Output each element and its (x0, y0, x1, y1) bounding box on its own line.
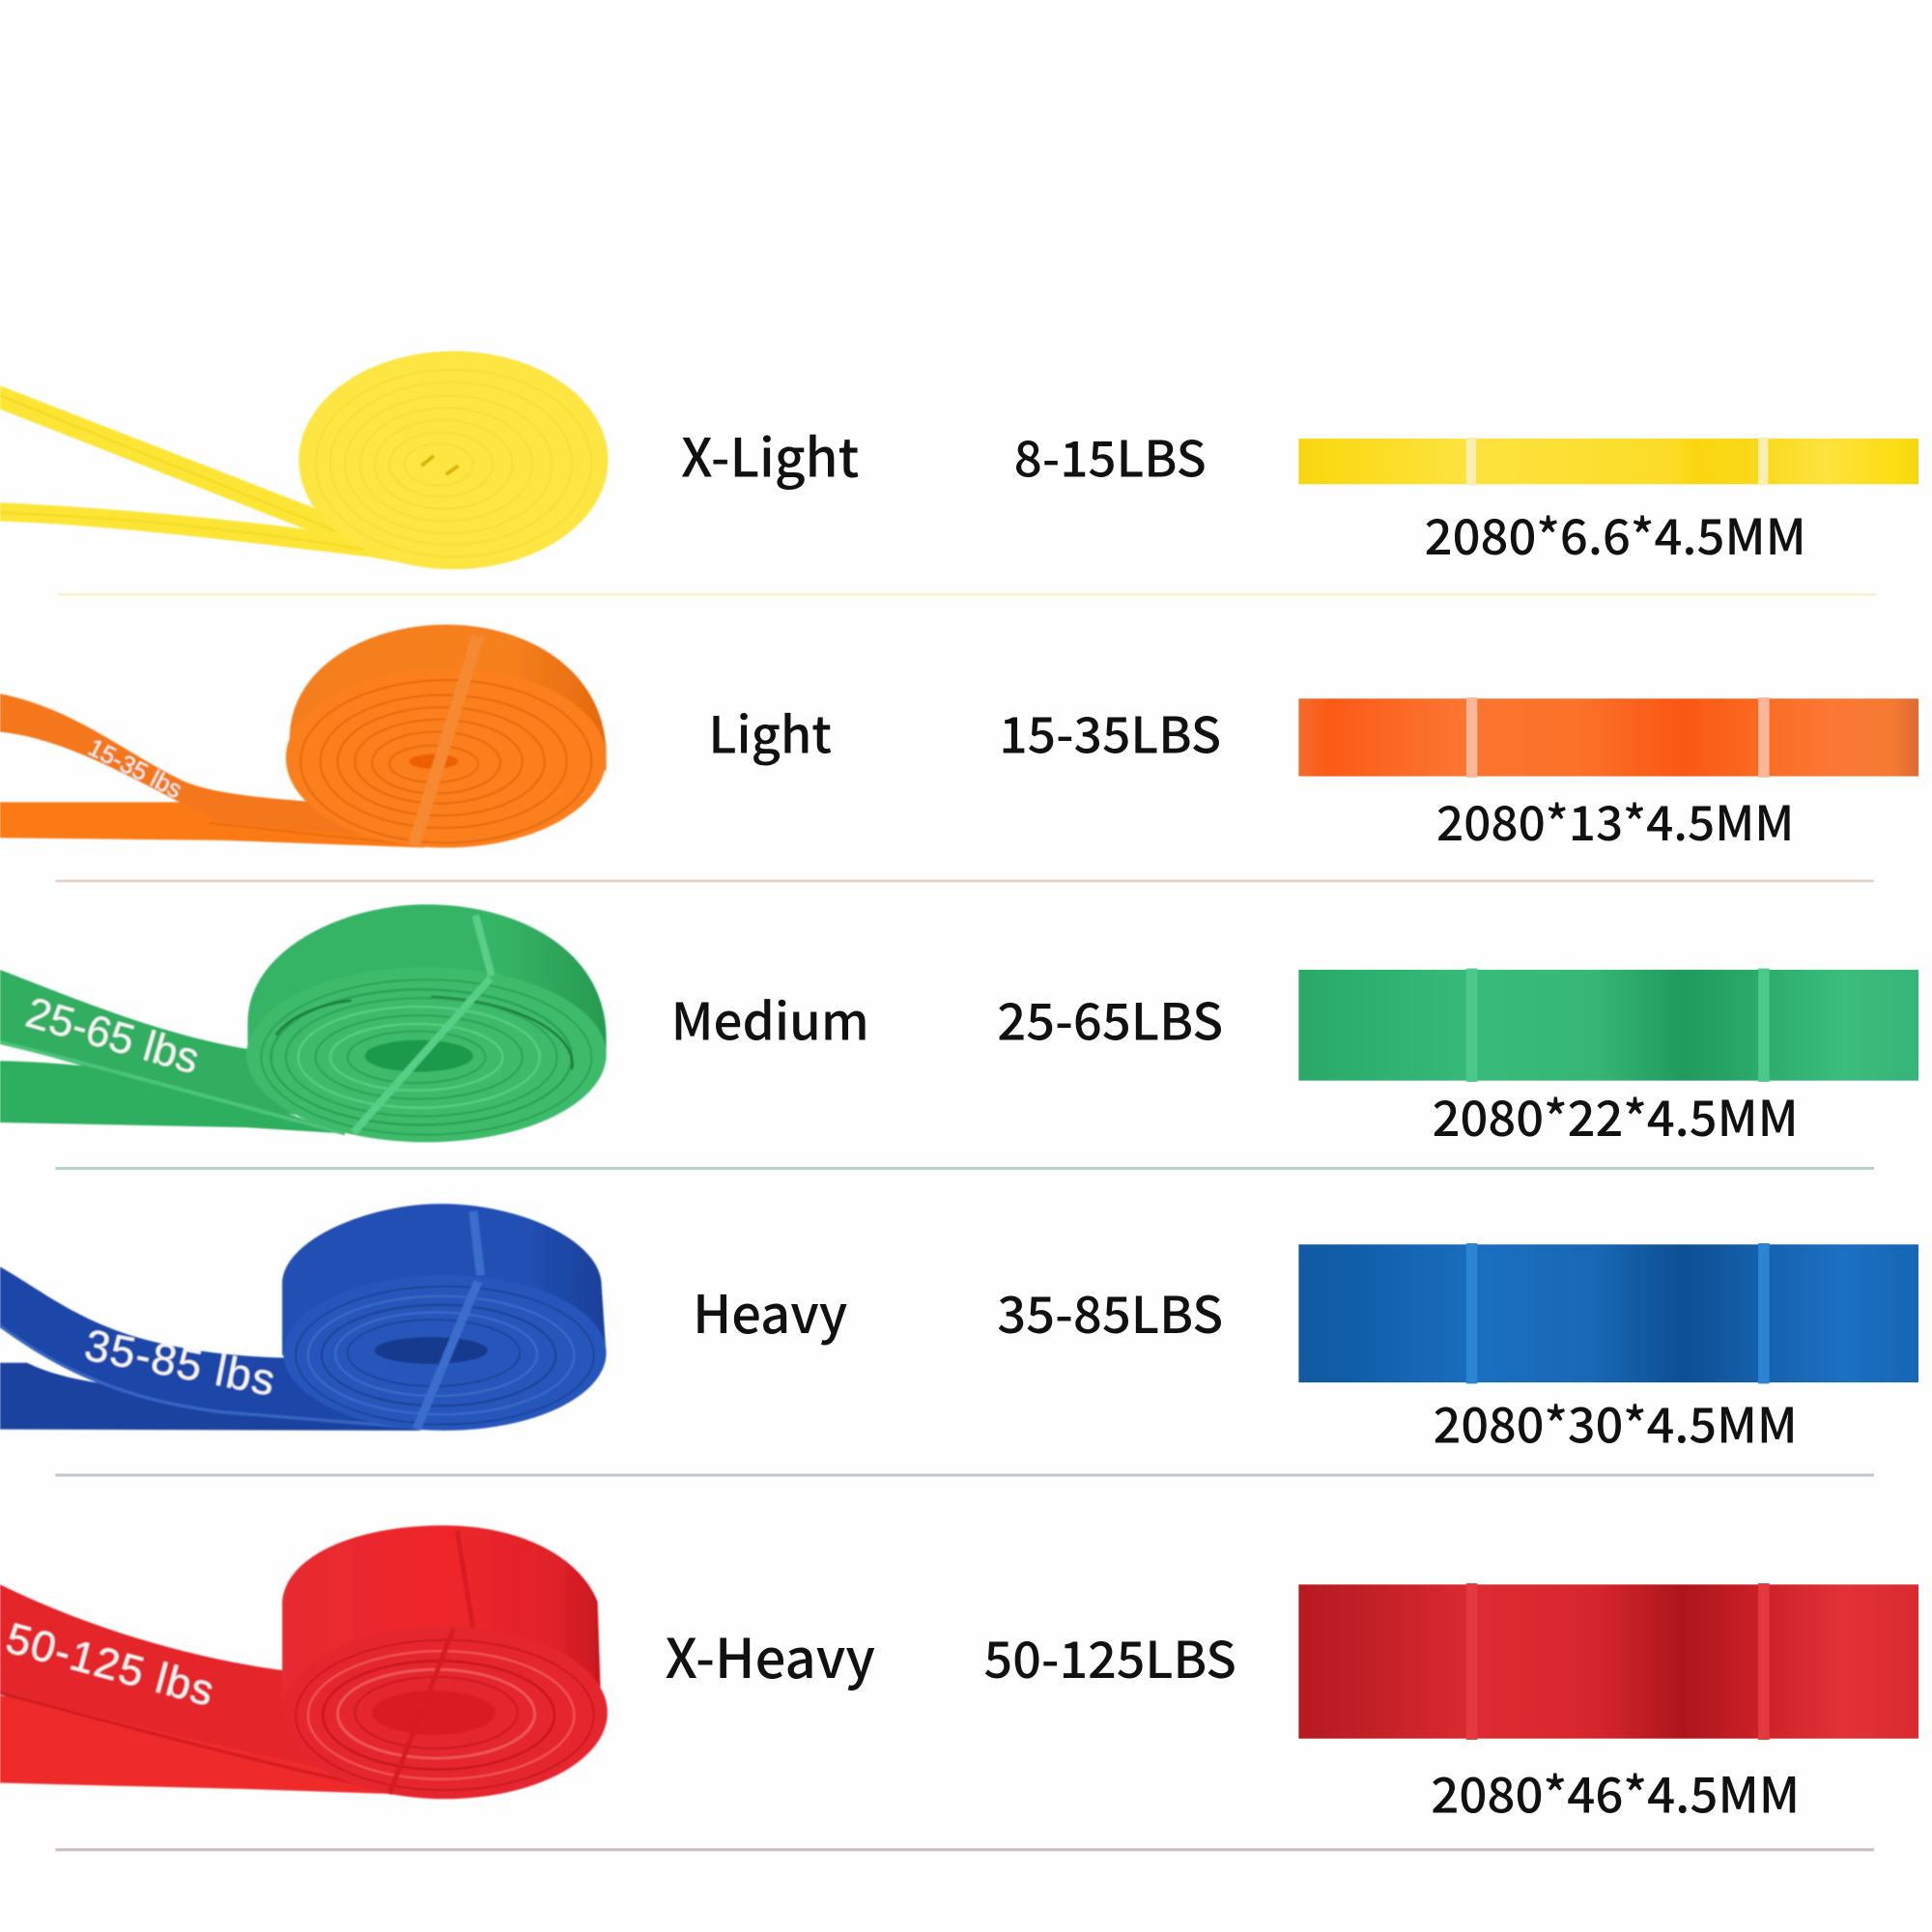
label: light name: Light (708, 695, 832, 768)
red rolled band photo (0, 1525, 608, 1799)
label: yellow dimensions: 2080*6.6*4.5MM (1425, 497, 1806, 569)
blue rolled band photo: 35-85 lbs (81, 1320, 280, 1406)
blue rolled band photo (0, 1204, 607, 1431)
band swatch: blue (1298, 1243, 1918, 1383)
label: x-heavy resistance: 50-125LBS (984, 1620, 1236, 1692)
row divider: heavy (55, 1474, 1874, 1477)
label: light resistance: 15-35LBS (999, 695, 1221, 767)
row divider: x-light (58, 593, 1877, 596)
label: heavy name: Heavy (693, 1272, 847, 1349)
label: medium resistance: 25-65LBS (997, 982, 1223, 1056)
red rolled band photo: 50-125 lbs (1, 1615, 220, 1716)
band swatch: orange (1298, 697, 1918, 778)
band swatch: red (1298, 1583, 1918, 1740)
label: green dimensions: 2080*22*4.5MM (1433, 1079, 1799, 1151)
row divider: x-heavy (55, 1848, 1874, 1851)
green rolled band photo: 25-65 lbs (20, 989, 204, 1083)
label: x-light name: X-Light (681, 415, 859, 493)
yellow rolled band photo (0, 352, 608, 569)
row divider: medium (55, 1167, 1874, 1170)
label: blue dimensions: 2080*30*4.5MM (1434, 1387, 1798, 1458)
band swatch: green (1298, 969, 1918, 1082)
label: red dimensions: 2080*46*4.5MM (1431, 1755, 1800, 1827)
row divider: light (55, 880, 1874, 882)
label: x-light resistance: 8-15LBS (1014, 420, 1207, 492)
orange rolled band photo: 15-35 lbs (84, 734, 186, 804)
green rolled band photo (0, 904, 607, 1142)
label: x-heavy name: X-Heavy (665, 1616, 875, 1694)
orange rolled band photo (0, 625, 607, 848)
band swatch: yellow (1298, 438, 1918, 486)
label: medium name: Medium (671, 982, 869, 1056)
label: orange dimensions: 2080*13*4.5MM (1436, 786, 1794, 855)
label: heavy resistance: 35-85LBS (997, 1275, 1223, 1349)
